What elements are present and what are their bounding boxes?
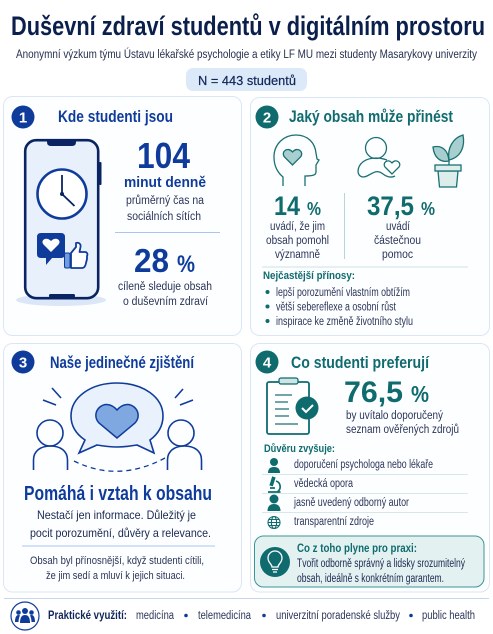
footer: practical use: univerzitní poradenské služby xyxy=(276,610,400,622)
icon: group of people xyxy=(11,602,39,630)
stat: 14 percent: % xyxy=(307,199,321,219)
illustration: two people sharing a heart speech bubble xyxy=(34,383,202,471)
icon: phone with clock and social reactions xyxy=(16,140,106,306)
supporting note xyxy=(30,555,204,582)
sample size pill xyxy=(186,68,307,91)
stat: 76.5 percent: seznam ověřených zdrojů xyxy=(346,424,459,436)
panel 1: where students are xyxy=(4,96,242,336)
panel 2: what content can bring xyxy=(250,98,490,336)
icon: doctor xyxy=(268,458,280,473)
stat: 104 minutes: 104 xyxy=(137,135,190,176)
stat: 104 minutes xyxy=(124,135,206,223)
stat: 28 percent xyxy=(118,242,212,308)
benefits list: větší sebereflexe a osobní růst xyxy=(276,302,397,314)
icon: potted plant xyxy=(433,135,464,187)
footer: practical use xyxy=(11,602,475,630)
trust factors list: jasně uvedený odborný autor xyxy=(293,497,409,509)
stat: 14 percent: obsah pomohl xyxy=(266,235,329,247)
number badge 3: 3 xyxy=(19,354,27,372)
stat: 28 percent: o duševním zdraví xyxy=(123,296,209,308)
stat: 14 percent: významně xyxy=(275,249,320,261)
stat: 28 percent: 28 xyxy=(134,242,169,279)
trust factors list: Důvěru zvyšuje: xyxy=(264,443,335,455)
panel 4: what students prefer xyxy=(250,344,490,592)
stat: 76.5 percent: % xyxy=(411,381,429,407)
trust factors list: vědecká opora xyxy=(294,478,353,490)
stat: 37.5 percent: částečnou xyxy=(374,235,421,247)
footer: practical use: telemedicína xyxy=(198,610,251,622)
icon: microscope xyxy=(268,477,280,492)
stat: 37.5 percent: % xyxy=(421,199,435,219)
number badge 1: 1 xyxy=(19,110,27,126)
trust factors list: doporučení psychologa nebo lékaře xyxy=(294,459,433,471)
supporting note: že jim sedí a mluví k jejich situaci. xyxy=(46,570,185,582)
stat: 14 percent: 14 xyxy=(274,191,300,221)
icon: person with heart xyxy=(358,138,400,177)
stat: 28 percent: % xyxy=(177,251,195,278)
footer: practical use: public health xyxy=(422,610,475,622)
footer: practical use: Praktické využití: xyxy=(48,610,127,622)
header xyxy=(11,11,485,91)
benefits list: inspirace ke změně životního stylu xyxy=(276,316,413,328)
number badge 2 xyxy=(256,106,278,128)
number badge 4: 4 xyxy=(263,354,272,372)
footer: practical use: medicína xyxy=(136,610,174,622)
heading 3: Naše jedinečné zjištění xyxy=(50,353,195,372)
stat: 104 minutes: průměrný čas na xyxy=(126,195,205,207)
callout: practical implications: obsah, ideálně s konkrétním garantem. xyxy=(297,573,444,585)
stat: 37.5 percent: 37,5 xyxy=(367,191,414,221)
number badge 3 xyxy=(12,350,34,374)
stat: 76.5 percent xyxy=(344,376,459,436)
icon: head with heart xyxy=(274,135,319,186)
trust factors list: transparentní zdroje xyxy=(294,516,374,528)
benefits list: Nejčastější přínosy: xyxy=(263,270,355,282)
stat: 37.5 percent: pomoc xyxy=(382,249,413,261)
callout: practical implications xyxy=(254,536,484,587)
stat: 14 percent xyxy=(266,191,329,261)
heading 2: Jaký obsah může přinést xyxy=(289,107,453,126)
sample size pill: N = 443 studentů xyxy=(198,73,296,88)
icon: globe xyxy=(268,516,280,528)
trust factors list xyxy=(262,443,468,528)
icon: light bulb xyxy=(260,547,290,577)
supporting note: Obsah byl přínosnější, když studenti cítili, xyxy=(30,555,204,567)
icon: clipboard with check xyxy=(267,378,318,434)
explanation: Nestačí jen informace. Důležitý je xyxy=(37,508,196,522)
icon: author xyxy=(268,494,280,511)
stat: 104 minutes: sociálních sítích xyxy=(127,211,201,223)
panel 3: unique finding xyxy=(4,344,242,592)
stat: 28 percent: cíleně sleduje obsah xyxy=(118,281,212,293)
heading 4: Co studenti preferují xyxy=(291,353,430,372)
callout: practical implications: Co z toho plyne pro praxi: xyxy=(297,543,417,555)
key message: Pomáhá i vztah k obsahu xyxy=(24,483,212,505)
benefits list xyxy=(263,270,413,328)
number badge 2: 2 xyxy=(263,110,271,126)
stat: 37.5 percent xyxy=(367,191,435,261)
number badge 4 xyxy=(256,350,278,374)
number badge 1 xyxy=(12,106,34,128)
stat: 37.5 percent: uvádí xyxy=(386,221,411,233)
stat: 104 minutes: minut denně xyxy=(124,174,206,191)
heading 1: Kde studenti jsou xyxy=(58,107,173,126)
stat: 76.5 percent: by uvítalo doporučený xyxy=(346,410,443,422)
stat: 14 percent: uvádí, že jim xyxy=(270,221,325,233)
explanation xyxy=(30,508,211,540)
stat: 76.5 percent: 76,5 xyxy=(344,376,403,409)
benefits list: lepší porozumění vlastním obtížím xyxy=(276,287,410,299)
explanation: pocit porozumění, důvěry a relevance. xyxy=(30,526,211,540)
